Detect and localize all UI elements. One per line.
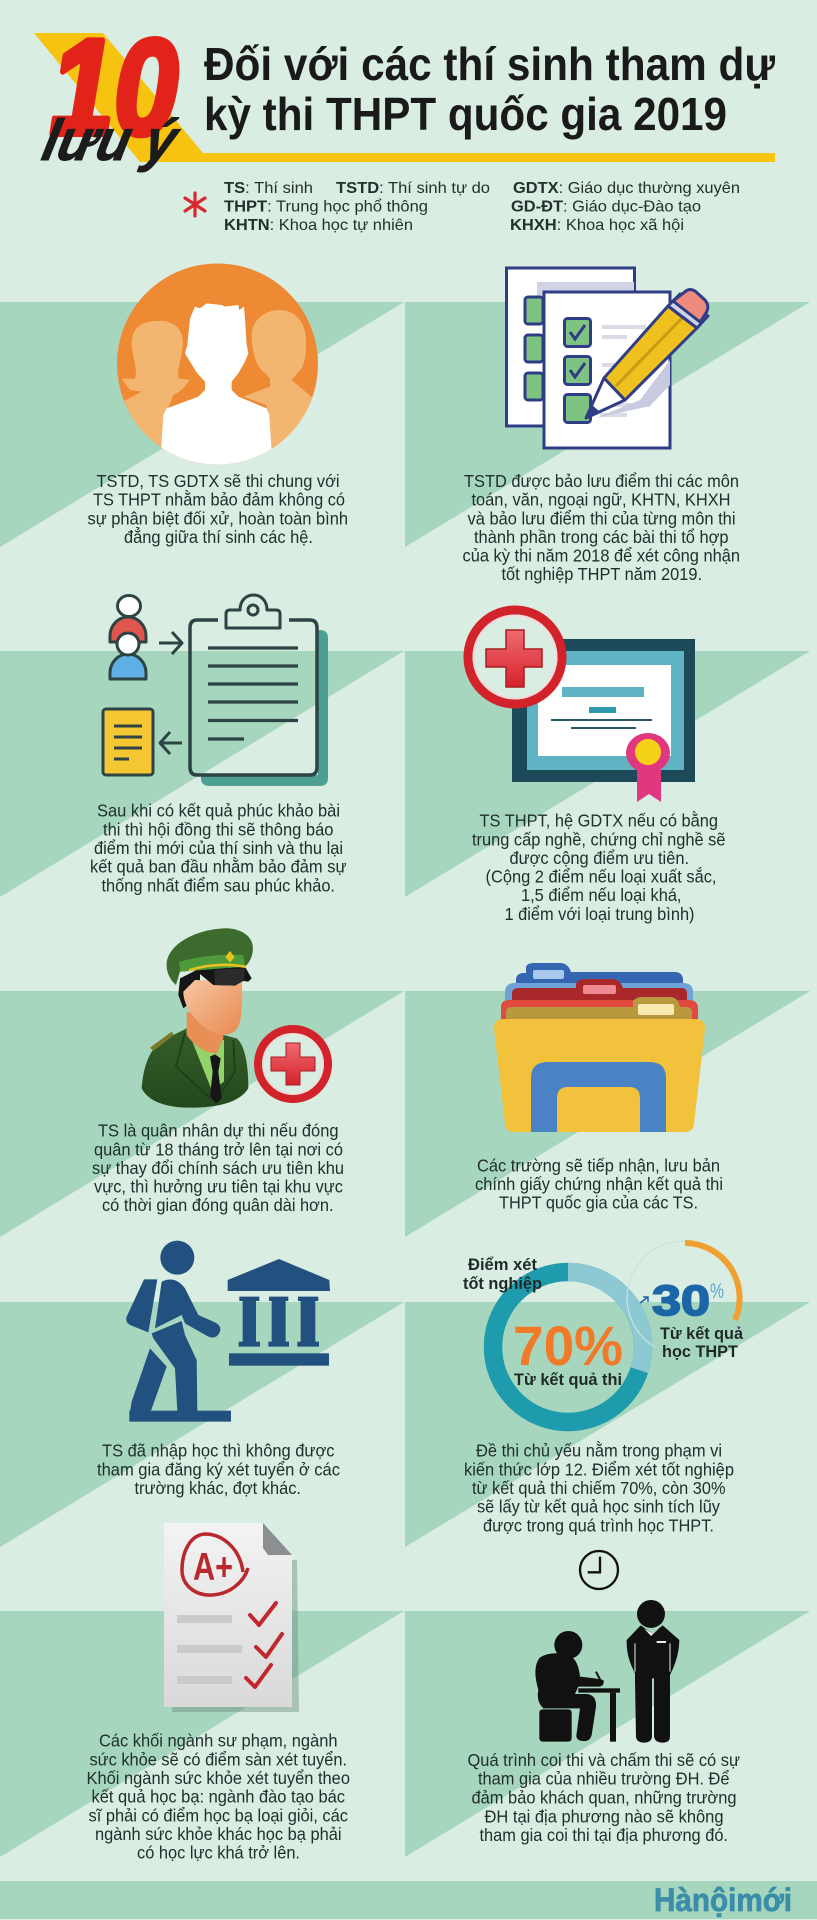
text block bbox=[97, 1440, 340, 1498]
chart labels: Từ kết quả thi bbox=[514, 1371, 622, 1389]
logo: Hànộimới: Hànộimới bbox=[654, 1882, 792, 1918]
title line 2: kỳ thi THPT quốc gia 2019 bbox=[204, 88, 727, 140]
text block bbox=[468, 1750, 740, 1845]
text block: thành phần trong các bài thi tổ hợp bbox=[474, 527, 728, 547]
text block: được cộng điểm ưu tiên. bbox=[510, 848, 689, 868]
text block bbox=[86, 1730, 350, 1862]
text block: tham gia đăng ký xét tuyển ở các bbox=[97, 1460, 340, 1480]
text block: THPT quốc gia của các TS. bbox=[499, 1192, 698, 1212]
text block: TS là quân nhân dự thi nếu đóng bbox=[98, 1120, 338, 1140]
abbreviations legend: KHXH: Khoa học xã hội bbox=[510, 217, 684, 234]
panel: coi thi và chấm thi bbox=[405, 1551, 810, 1857]
text block: tham gia coi thi tại địa phương đó. bbox=[480, 1825, 728, 1845]
panel: khối ngành sư phạm, sức khỏe bbox=[0, 1523, 404, 1862]
text block: sự thay đổi chính sách ưu tiên khu bbox=[92, 1158, 344, 1178]
icon: folder bbox=[494, 963, 705, 1132]
panel: lưu bản chính bbox=[405, 963, 810, 1237]
text block: (Cộng 2 điểm nếu loại xuất sắc, bbox=[486, 866, 716, 886]
text block: quân từ 18 tháng trở lên tại nơi có bbox=[94, 1140, 343, 1160]
panel: đã nhập học bbox=[0, 1241, 404, 1547]
chart labels: tốt nghiệp bbox=[463, 1275, 542, 1293]
text block: đẳng giữa thí sinh các hệ. bbox=[124, 527, 313, 547]
text block bbox=[90, 800, 346, 896]
chart labels: % bbox=[710, 1280, 724, 1303]
lưu ý: lưu ý bbox=[37, 109, 186, 173]
text block: ngành sức khỏe khác học bạ phải bbox=[95, 1824, 342, 1844]
icon: A+ graded paper bbox=[164, 1523, 299, 1712]
text block: kết quả học bạ: ngành đào tạo bác bbox=[92, 1786, 345, 1806]
plus badge bbox=[258, 1029, 328, 1099]
text block: Đề thi chủ yếu nằm trong phạm vi bbox=[476, 1440, 722, 1460]
abbreviations legend: TSTD: Thí sinh tự do bbox=[336, 180, 490, 197]
panel: quân nhân bbox=[0, 928, 404, 1237]
abbreviations legend: THPT: Trung học phổ thông bbox=[224, 198, 428, 216]
A+ mark bbox=[182, 1534, 248, 1595]
icon: certificate with plus badge bbox=[468, 610, 695, 802]
text block: vực, thì hưởng ưu tiên tại khu vực bbox=[94, 1176, 343, 1196]
panel: bảo lưu điểm thi bbox=[405, 268, 810, 584]
text block: tốt nghiệp THPT năm 2019. bbox=[502, 564, 702, 584]
text block: 1,5 điểm nếu loại khá, bbox=[521, 885, 682, 905]
text block: TSTD, TS GDTX sẽ thi chung với bbox=[96, 471, 340, 491]
chart labels: Điểm xét bbox=[468, 1256, 538, 1274]
icon: student walking to school bbox=[126, 1241, 330, 1422]
A+ mark: A+ bbox=[193, 1546, 233, 1589]
icon: people, clipboard and document bbox=[103, 595, 328, 786]
abbreviations legend: TS: Thí sinh bbox=[224, 180, 313, 197]
yellow title stripe bbox=[34, 33, 775, 162]
text block: thi thì hội đồng thi sẽ thông báo bbox=[103, 820, 334, 840]
text block: TS đã nhập học thì không được bbox=[102, 1440, 335, 1460]
text block bbox=[88, 471, 348, 547]
text block bbox=[464, 1440, 734, 1536]
text block: Quá trình coi thi và chấm thi sẽ có sự bbox=[468, 1750, 740, 1770]
text block: có thời gian đóng quân dài hơn. bbox=[102, 1195, 334, 1215]
chart labels: Từ kết quả bbox=[660, 1325, 744, 1343]
text block: toán, văn, ngoại ngữ, KHTN, KHXH bbox=[472, 490, 730, 510]
text block: đảm bảo khách quan, những trường bbox=[472, 1788, 736, 1808]
asterisk icon bbox=[185, 193, 205, 216]
abbreviations legend: GD-ĐT: Giáo dục-Đào tạo bbox=[511, 198, 701, 216]
text block: từ kết quả thi chiếm 70%, còn 30% bbox=[472, 1478, 726, 1498]
icon: soldier bbox=[142, 928, 253, 1108]
text block: sự phân biệt đối xử, hoàn toàn bình bbox=[88, 508, 348, 528]
icon: clock, seated student and invigilator bbox=[535, 1551, 679, 1743]
text block: được trong quá trình học THPT. bbox=[483, 1516, 714, 1536]
text block: thống nhất điểm sau phúc khảo. bbox=[102, 876, 335, 896]
text block: kết quả ban đầu nhằm bảo đảm sự bbox=[90, 856, 346, 876]
text block: sĩ phải có điểm học bạ loại giỏi, các bbox=[88, 1806, 348, 1826]
text block: Sau khi có kết quả phúc khảo bài bbox=[97, 800, 340, 820]
header bbox=[34, 11, 776, 234]
text block: tham gia của nhiều trường ĐH. Để bbox=[478, 1769, 730, 1789]
text block: sức khỏe sẽ có điểm sàn xét tuyển. bbox=[90, 1750, 347, 1770]
panel: cộng điểm ưu tiên bbox=[405, 610, 810, 924]
text block: TS THPT nhằm bảo đảm không có bbox=[93, 490, 345, 510]
panel: điểm xét tốt nghiệp bbox=[405, 1241, 810, 1547]
text block: Các khối ngành sư phạm, ngành bbox=[99, 1730, 338, 1750]
text block: và bảo lưu điểm thi của từng môn thi bbox=[468, 508, 736, 528]
text block: TS THPT, hệ GDTX nếu có bằng bbox=[480, 810, 718, 830]
footer band with logo bbox=[0, 1881, 817, 1919]
text block: chính giấy chứng nhận kết quả thi bbox=[475, 1174, 723, 1194]
text block: Khối ngành sức khỏe xét tuyển theo bbox=[86, 1768, 350, 1788]
text block bbox=[475, 1156, 723, 1212]
chart labels: 70% bbox=[513, 1314, 623, 1377]
donut chart 70 / 30 bbox=[493, 1241, 740, 1422]
text block bbox=[462, 471, 740, 584]
abbreviations legend: KHTN: Khoa học tự nhiên bbox=[224, 217, 413, 234]
title line 1: Đối với các thí sinh tham dự bbox=[204, 38, 776, 90]
text block: của kỳ thi năm 2018 để xét công nhận bbox=[462, 546, 740, 566]
text block: có học lực khá trở lên. bbox=[137, 1842, 300, 1862]
abbreviations legend: GDTX: Giáo dục thường xuyên bbox=[513, 180, 740, 197]
icon: three people in orange circle bbox=[117, 264, 323, 468]
abbreviations legend bbox=[224, 180, 740, 234]
text block: trường khác, đợt khác. bbox=[134, 1478, 301, 1498]
number 10: 10 bbox=[50, 11, 178, 163]
text block: Các trường sẽ tiếp nhận, lưu bản bbox=[477, 1156, 720, 1176]
text block: ĐH tại địa phương nào sẽ không bbox=[484, 1807, 724, 1827]
chart labels: học THPT bbox=[662, 1343, 738, 1361]
chart labels bbox=[463, 1256, 744, 1389]
text block: điểm thi mới của thí sinh và thu lại bbox=[94, 838, 343, 858]
panel: thi chung bbox=[0, 264, 404, 547]
text block: sẽ lấy từ kết quả học sinh tích lũy bbox=[477, 1496, 720, 1516]
text block: kiến thức lớp 12. Điểm xét tốt nghiệp bbox=[464, 1460, 734, 1480]
text block: trung cấp nghề, chứng chỉ nghề sẽ bbox=[472, 830, 726, 850]
text block bbox=[472, 810, 726, 924]
text block: 1 điểm với loại trung bình) bbox=[504, 904, 694, 924]
panel: phúc khảo bbox=[0, 595, 404, 897]
text block bbox=[92, 1120, 344, 1215]
icon: checklist and pencil bbox=[506, 268, 708, 448]
text block: TSTD được bảo lưu điểm thi các môn bbox=[464, 471, 739, 491]
chart labels: 30 bbox=[652, 1277, 710, 1325]
